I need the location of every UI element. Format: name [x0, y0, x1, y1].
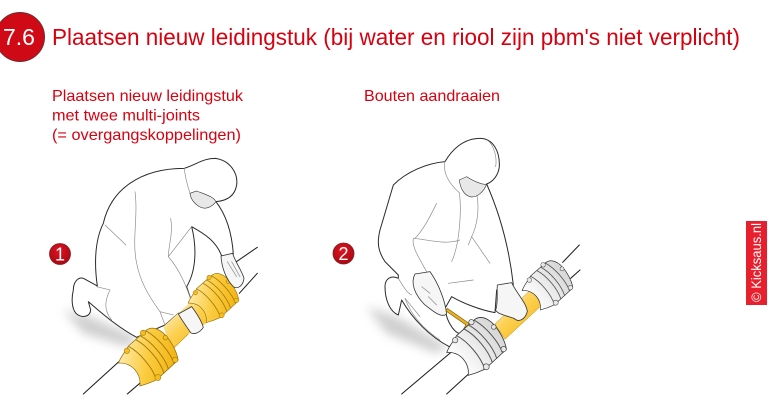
multi-joint back — [517, 254, 579, 316]
step number 2: 2 — [338, 244, 349, 264]
section number badge: 7.6 — [3, 24, 35, 50]
step 1 caption: Plaatsen nieuw leidingstuk — [52, 88, 244, 105]
title: Plaatsen nieuw leidingstuk (bij water en riool zijn pbm's niet verplicht) — [52, 24, 740, 50]
step 1 caption — [52, 88, 244, 144]
glove on pipe — [496, 283, 527, 320]
glove on front pipe — [178, 307, 203, 334]
step number 2 — [333, 243, 354, 264]
panel: step 2 illustration — [367, 138, 580, 394]
worker in protective suit — [72, 158, 237, 337]
wrench — [446, 308, 473, 332]
multi-joint front — [440, 310, 514, 383]
worker in protective suit — [378, 138, 513, 347]
ground shadow — [63, 310, 140, 347]
copyright tag: © Kicksaus.nl — [748, 223, 764, 302]
multi-joint back — [183, 267, 245, 329]
multi-joint front — [112, 320, 186, 393]
pipe with yellow section — [402, 245, 580, 394]
panel: step 1 illustration — [63, 158, 257, 394]
pipe with yellow section — [83, 247, 257, 394]
step 1 caption: (= overgangskoppelingen) — [52, 127, 241, 144]
step number 1: 1 — [55, 244, 65, 264]
section number badge — [0, 12, 44, 62]
step number 1 — [50, 244, 70, 264]
glove on back joint — [221, 253, 244, 288]
step 2 caption: Bouten aandraaien — [364, 88, 500, 105]
step 1 caption: met twee multi-joints — [52, 108, 200, 124]
ground shadow — [367, 307, 448, 353]
